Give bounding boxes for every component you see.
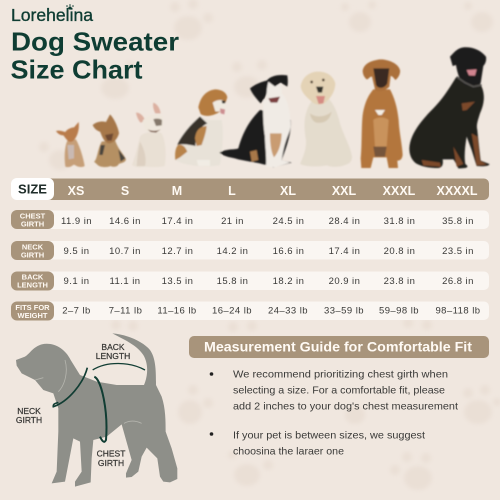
title bbox=[10, 26, 179, 84]
row: fits for weight: FITS FOR bbox=[15, 303, 50, 312]
row: fits for weight: 2–7 lb bbox=[62, 306, 91, 316]
row: fits for weight: 16–24 lb bbox=[212, 306, 252, 316]
row: neck girth bbox=[11, 241, 489, 260]
row: fits for weight: 24–33 lb bbox=[268, 306, 308, 316]
dog: XL border collie bbox=[219, 75, 292, 167]
size names: L bbox=[228, 184, 236, 198]
dog silhouette bbox=[16, 333, 177, 487]
label: chest girth: CHEST bbox=[97, 448, 125, 458]
neck girth line bbox=[53, 368, 87, 407]
row: back length bbox=[11, 272, 489, 290]
measurement diagram bbox=[16, 333, 177, 487]
row: neck girth: 14.2 in bbox=[217, 246, 248, 257]
dog: L beagle bbox=[175, 89, 227, 166]
guide bullet 2: If your pet is between sizes, we suggest bbox=[233, 430, 425, 442]
row: neck girth: 23.5 in bbox=[442, 246, 474, 257]
guide heading: Measurement Guide for Comfortable Fit bbox=[204, 338, 472, 354]
row: fits for weight: 7–11 lb bbox=[109, 306, 142, 316]
guide heading bbox=[189, 336, 489, 358]
row: back length: 13.5 in bbox=[162, 276, 193, 287]
row: neck girth: GIRTH bbox=[21, 250, 44, 260]
row: chest girth: 35.8 in bbox=[442, 216, 474, 227]
row: fits for weight: WEIGHT bbox=[18, 311, 48, 320]
row: back length: BACK bbox=[22, 272, 44, 282]
row: back length: 18.2 in bbox=[273, 276, 304, 287]
size names: M bbox=[172, 184, 182, 198]
row: fits for weight: 33–59 lb bbox=[324, 306, 364, 316]
label: neck girth: GIRTH bbox=[16, 415, 42, 425]
row: fits for weight: 11–16 lb bbox=[157, 306, 197, 316]
row: fits for weight: 59–98 lb bbox=[379, 306, 419, 316]
row: neck girth: NECK bbox=[22, 242, 44, 252]
label: neck girth: NECK bbox=[17, 406, 41, 416]
label: chest girth: GIRTH bbox=[98, 458, 124, 468]
size names: S bbox=[121, 184, 129, 198]
dog: XXXXL rottweiler bbox=[409, 47, 489, 168]
row: chest girth: 28.4 in bbox=[329, 216, 360, 227]
row: neck girth: 16.6 in bbox=[273, 246, 304, 257]
size names: XXXXL bbox=[436, 184, 478, 198]
row: fits for weight: 98–118 lb bbox=[435, 306, 481, 316]
row: back length: 11.1 in bbox=[110, 276, 140, 287]
row: back length: 20.9 in bbox=[329, 276, 360, 287]
chest girth line bbox=[94, 377, 106, 442]
row: chest girth: 11.9 in bbox=[61, 216, 92, 227]
row: neck girth: 10.7 in bbox=[109, 246, 141, 257]
guide bullet 1: add 2 inches to your dog's chest measurement bbox=[233, 400, 458, 412]
row: back length: 15.8 in bbox=[217, 276, 248, 287]
row: chest girth: 14.6 in bbox=[109, 216, 141, 227]
row: chest girth: 31.8 in bbox=[384, 216, 415, 227]
size table bbox=[11, 178, 489, 320]
dog: S yorkie bbox=[93, 114, 126, 167]
row: chest girth: 17.4 in bbox=[162, 216, 193, 227]
size names bbox=[68, 184, 478, 198]
row: neck girth: 17.4 in bbox=[329, 246, 360, 257]
icon: logo paw bbox=[66, 4, 74, 10]
row: chest girth: CHEST bbox=[20, 212, 46, 220]
logo: Lorehelina: Lorehelina bbox=[11, 5, 93, 25]
row: back length: 23.8 in bbox=[384, 276, 415, 287]
dog: M french bulldog bbox=[132, 103, 166, 167]
row: neck girth: 20.8 in bbox=[384, 246, 415, 257]
size names: XS bbox=[68, 184, 84, 198]
label: back length: LENGTH bbox=[96, 351, 130, 361]
size header bar bbox=[11, 178, 489, 200]
row: chest girth bbox=[11, 210, 489, 229]
label: back length: BACK bbox=[101, 342, 125, 352]
title: Dog Sweater bbox=[11, 26, 179, 56]
size label pill bbox=[11, 178, 54, 200]
size names: XXXL bbox=[383, 184, 416, 198]
row: neck girth: 9.5 in bbox=[64, 246, 89, 257]
row: back length: LENGTH bbox=[17, 280, 48, 290]
guide bullet 1: We recommend prioritizing chest girth when bbox=[233, 368, 448, 380]
back length line bbox=[93, 363, 145, 370]
row: neck girth: 12.7 in bbox=[162, 246, 193, 257]
dog: XXXL boxer bbox=[361, 59, 403, 168]
row: back length: 26.8 in bbox=[442, 276, 474, 287]
guide bullet 2: choosina the laraer one bbox=[233, 446, 344, 458]
guide bullet 1 bbox=[210, 368, 458, 412]
guide bullet 2 bbox=[210, 430, 425, 458]
size label pill: SIZE bbox=[18, 182, 47, 196]
row: fits for weight bbox=[11, 302, 489, 320]
row: chest girth: GIRTH bbox=[21, 220, 44, 228]
dog: XS chihuahua bbox=[56, 122, 85, 167]
dog: XXL golden retriever bbox=[300, 72, 352, 167]
measurement guide panel bbox=[189, 336, 489, 458]
row: chest girth: 21 in bbox=[221, 216, 244, 227]
photo row: eight dogs by size bbox=[56, 47, 489, 168]
size names: XL bbox=[280, 184, 296, 198]
row: chest girth: 24.5 in bbox=[273, 216, 304, 227]
guide bullet 1: selecting a size. For a comfortable fit, please bbox=[233, 384, 445, 396]
size names: XXL bbox=[332, 184, 357, 198]
row: back length: 9.1 in bbox=[64, 276, 89, 287]
title: Size Chart bbox=[10, 54, 143, 84]
